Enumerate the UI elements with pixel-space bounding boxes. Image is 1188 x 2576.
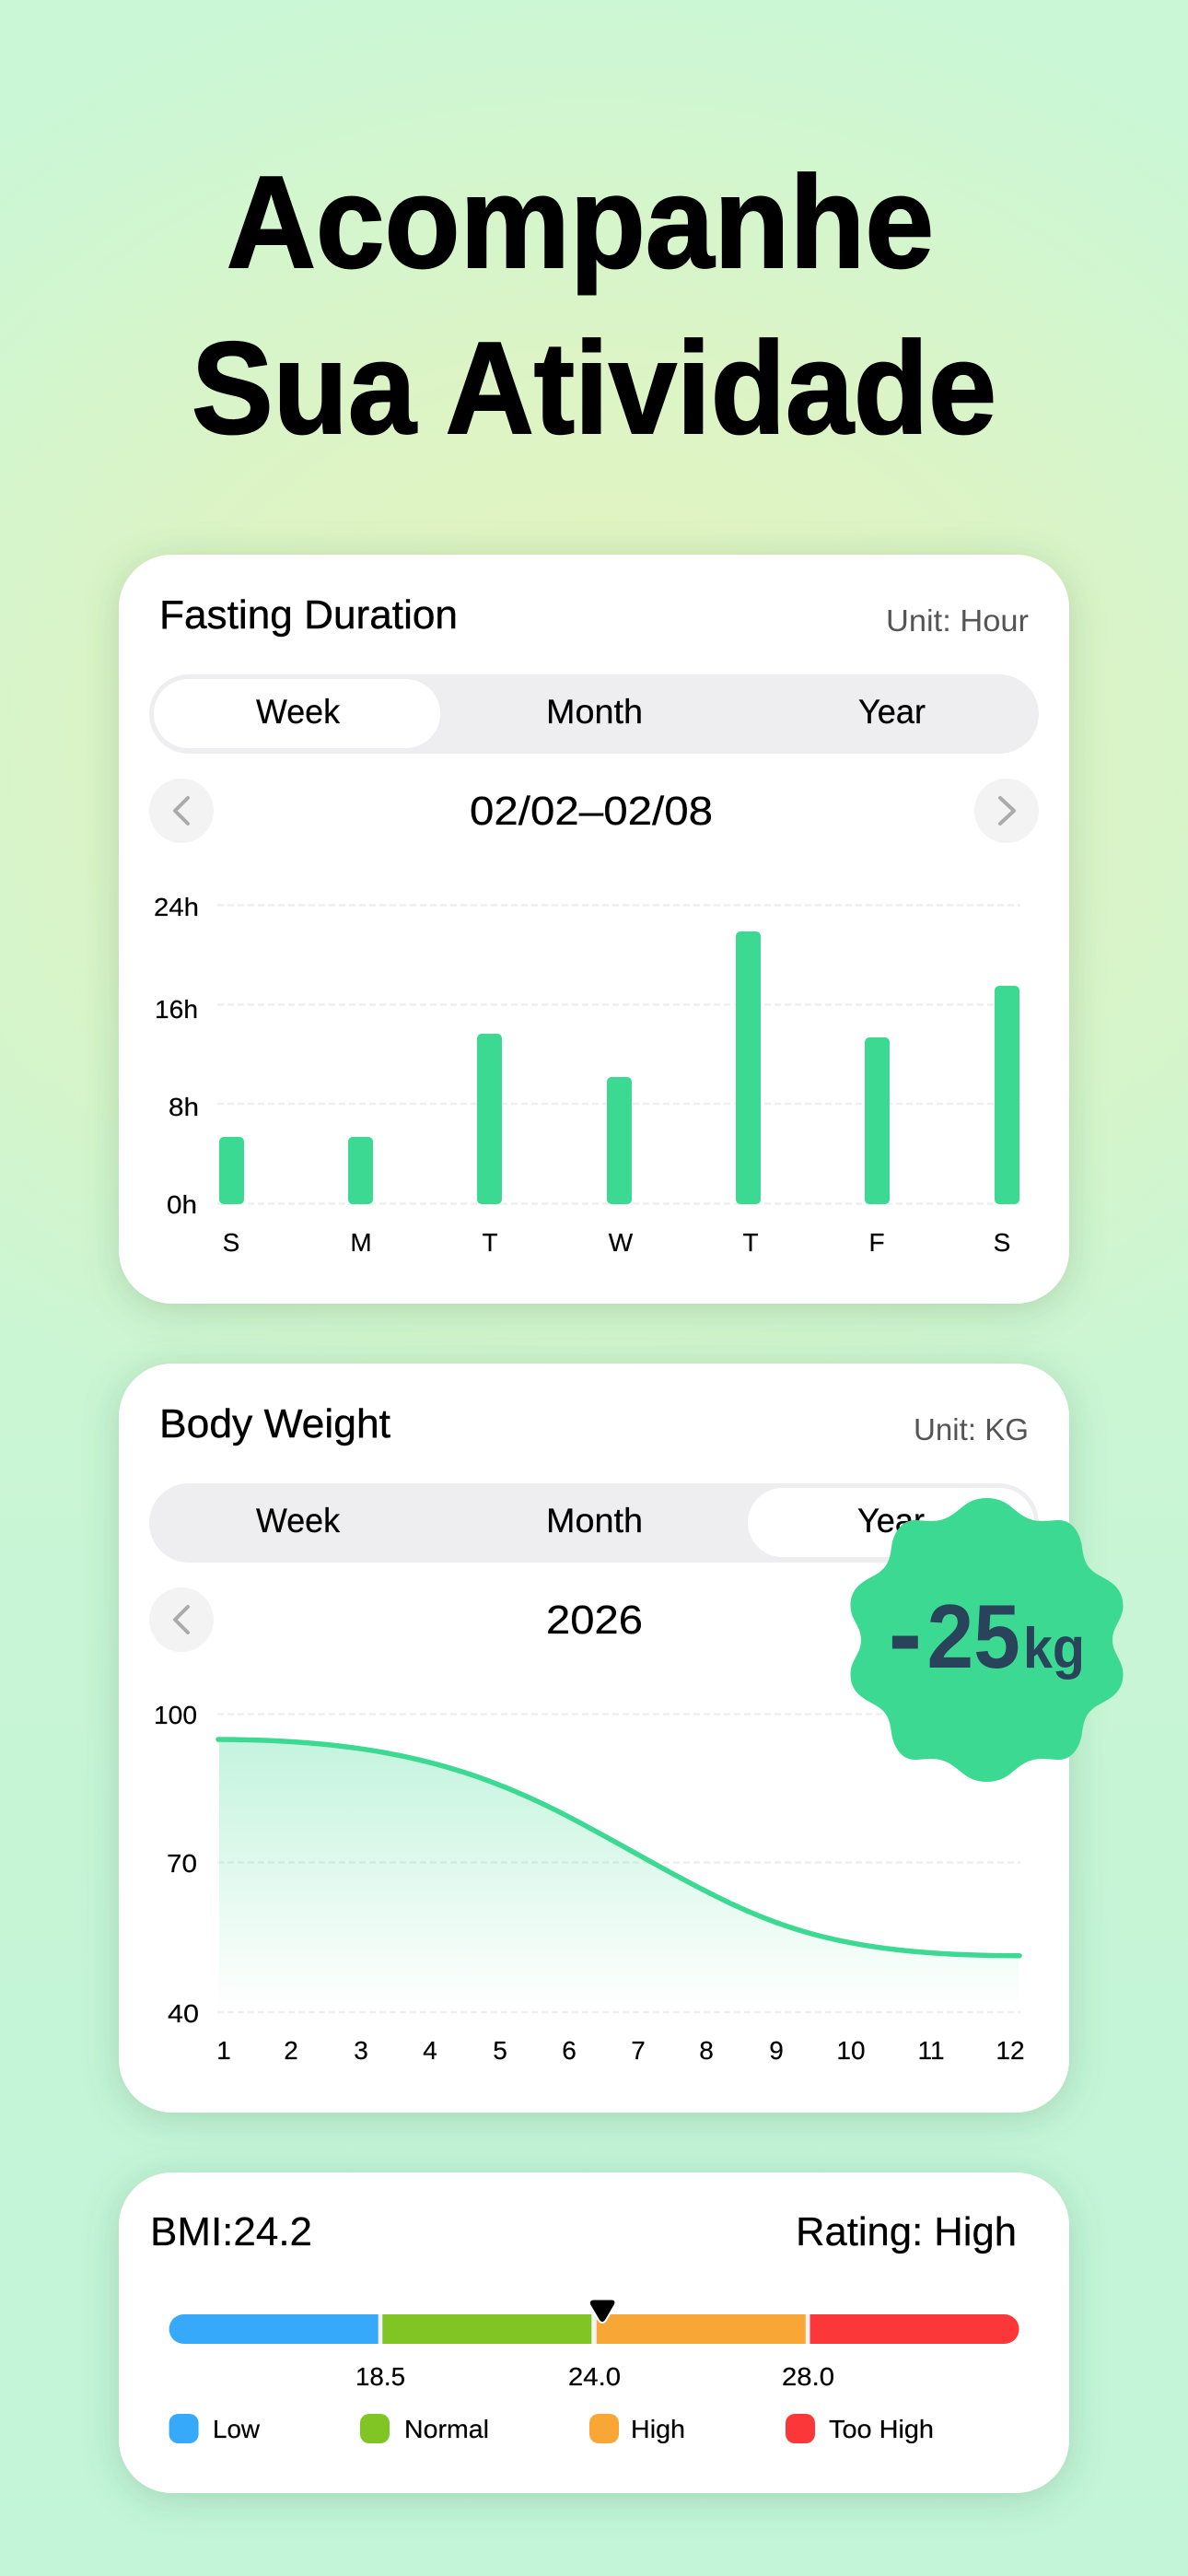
year navigator — [149, 1587, 643, 1652]
panel: fasting duration — [119, 555, 1069, 1304]
segmented control: week selected: Week — [256, 693, 340, 731]
line chart: body weight over months: 100 — [154, 1701, 197, 1729]
line chart: body weight over months: 12 — [996, 2036, 1025, 2065]
line chart: body weight over months: 11 — [917, 2036, 945, 2065]
scale thresholds: 24.0 — [568, 2362, 621, 2391]
scale thresholds: 28.0 — [782, 2362, 834, 2391]
date navigator: 02/02–02/08 — [470, 789, 713, 834]
segmented control: year selected — [149, 1483, 1039, 1563]
line chart: body weight over months: 10 — [836, 2036, 866, 2065]
bar chart: fasting hours by weekday: F — [868, 1228, 885, 1257]
line chart: body weight over months: 4 — [423, 2036, 437, 2065]
badge: minus 25 kg: - — [889, 1573, 922, 1694]
segmented control: year selected: Year — [857, 1502, 925, 1540]
year navigator: 2026 — [546, 1598, 643, 1643]
bar chart: fasting hours by weekday: M — [350, 1228, 372, 1257]
line chart: body weight over months: 5 — [493, 2036, 507, 2065]
legend: Normal — [404, 2415, 489, 2443]
heading: fasting duration: Fasting Duration — [159, 592, 458, 638]
legend: Low — [213, 2415, 261, 2443]
unit label: kg: Unit: KG — [914, 1412, 1029, 1446]
heading: body weight: Body Weight — [159, 1401, 390, 1446]
badge: minus 25 kg — [851, 1498, 1124, 1782]
line chart: body weight over months: 7 — [631, 2036, 646, 2065]
bar chart: fasting hours by weekday: 8h — [169, 1093, 199, 1121]
legend: High — [631, 2415, 685, 2443]
line chart: body weight over months: 70 — [167, 1849, 197, 1878]
panel: BMI — [119, 2172, 1069, 2493]
line chart: body weight over months: 6 — [562, 2036, 577, 2065]
line chart: body weight over months: 40 — [168, 1999, 199, 2028]
BMI rating: Rating: High — [796, 2209, 1017, 2254]
segmented control: week selected: Month — [546, 693, 643, 731]
title — [192, 149, 996, 462]
unit label: hour: Unit: Hour — [886, 603, 1029, 638]
bar chart: fasting hours by weekday — [154, 893, 1020, 1257]
badge: minus 25 kg: kg — [1023, 1617, 1085, 1680]
BMI scale bar — [169, 2314, 1019, 2344]
scale thresholds: 18.5 — [355, 2362, 405, 2391]
title: Acompanhe — [227, 149, 934, 296]
line chart: body weight over months: 9 — [769, 2036, 784, 2065]
panel: body weight — [119, 1364, 1069, 2113]
bar chart: fasting hours by weekday: T — [482, 1228, 498, 1257]
bar chart: fasting hours by weekday: 0h — [167, 1190, 197, 1219]
bar chart: fasting hours by weekday: 24h — [154, 893, 199, 921]
line chart: body weight over months: 1 — [216, 2036, 231, 2065]
segmented control: year selected: Month — [546, 1502, 643, 1540]
date navigator — [149, 779, 1039, 843]
line chart: body weight over months — [154, 1701, 1025, 2065]
scale marker — [590, 2300, 614, 2322]
BMI value: BMI:24.2 — [150, 2209, 312, 2254]
bar chart: fasting hours by weekday: S — [994, 1228, 1010, 1257]
segmented control: week selected: Year — [858, 693, 926, 731]
segmented control: year selected: Week — [256, 1502, 340, 1540]
bar chart: fasting hours by weekday: W — [609, 1228, 634, 1257]
badge: minus 25 kg: 25 — [926, 1587, 1020, 1688]
line chart: body weight over months: 8 — [699, 2036, 714, 2065]
scale thresholds — [355, 2362, 834, 2391]
bar chart: fasting hours by weekday: T — [742, 1228, 759, 1257]
legend — [169, 2414, 934, 2443]
bar chart: fasting hours by weekday: 16h — [155, 995, 198, 1024]
title: Sua Atividade — [192, 315, 996, 462]
line chart: body weight over months: 2 — [284, 2036, 298, 2065]
segmented control: week selected — [149, 674, 1039, 754]
bar chart: fasting hours by weekday: S — [223, 1228, 239, 1257]
legend: Too High — [829, 2415, 934, 2443]
line chart: body weight over months: 3 — [354, 2036, 368, 2065]
